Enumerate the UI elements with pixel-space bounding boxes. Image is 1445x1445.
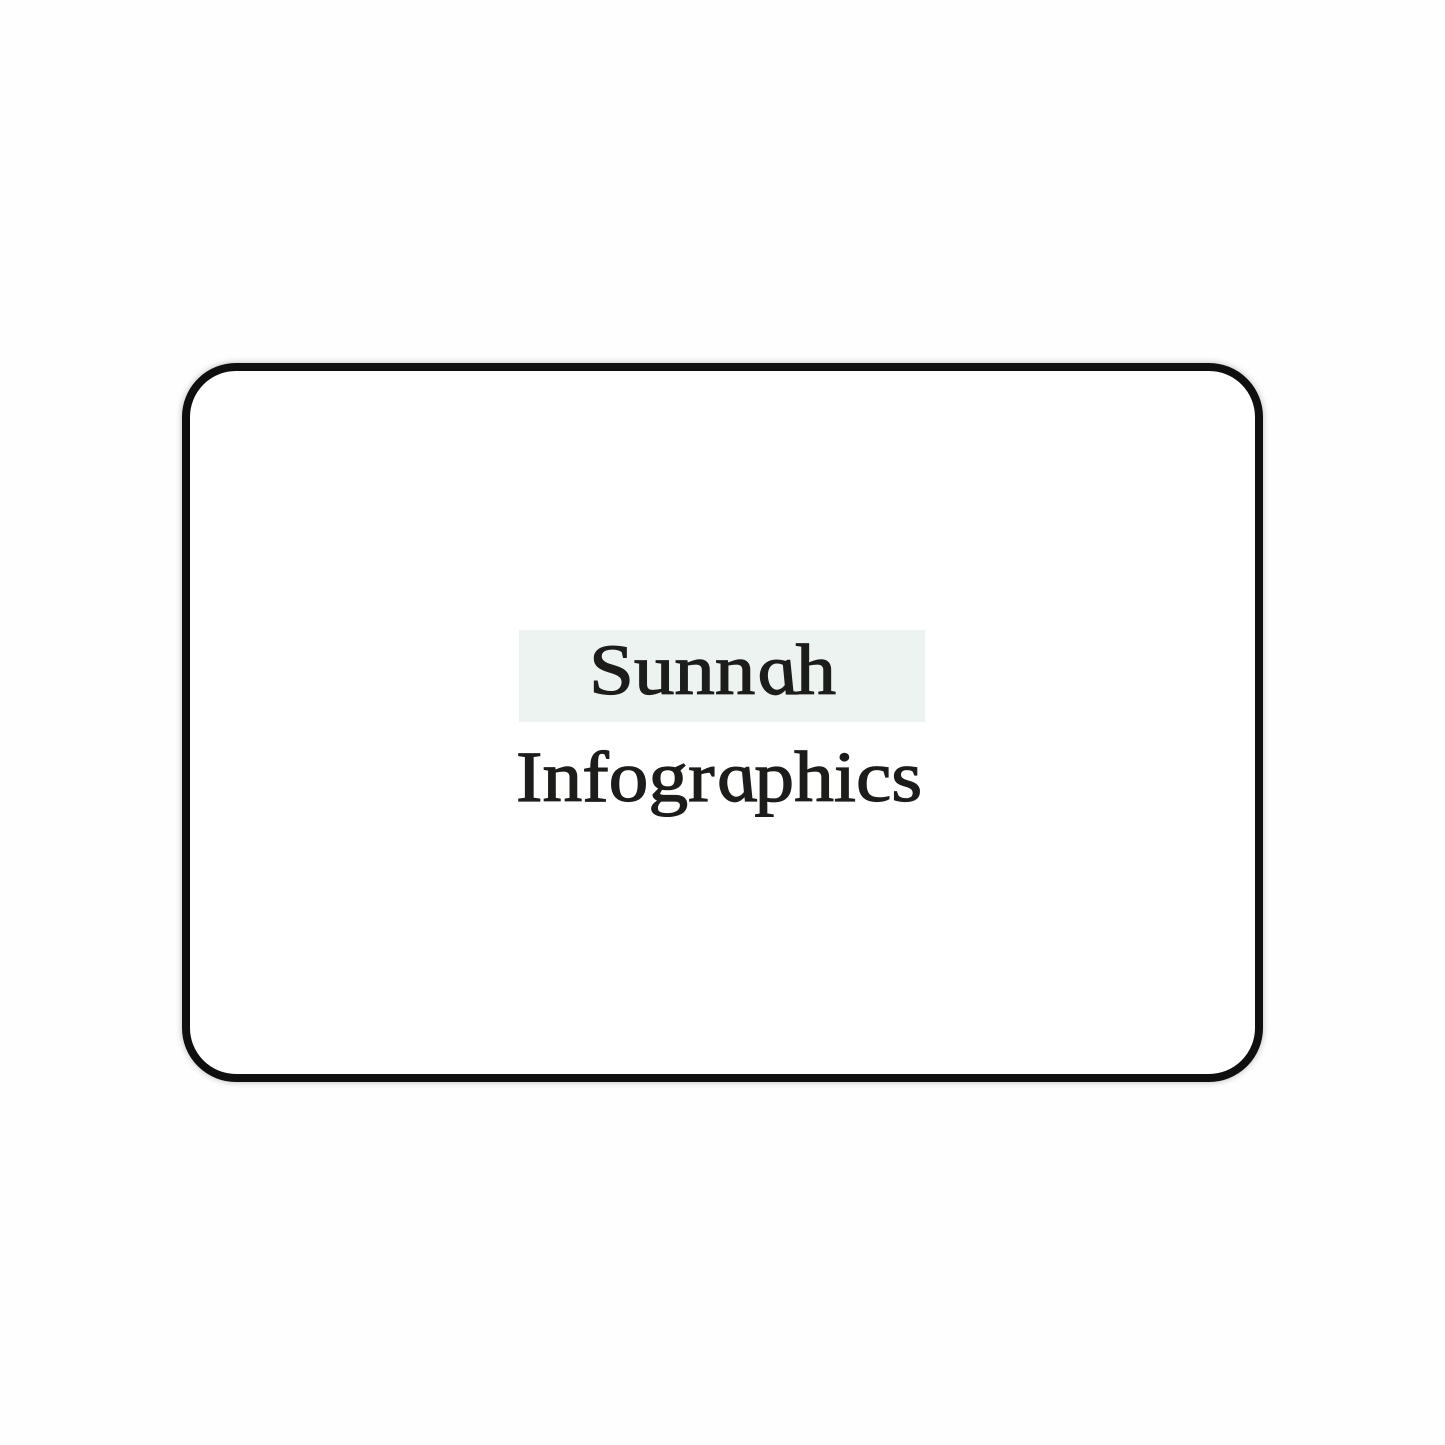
title line: Sunnah: a xyxy=(743,630,808,710)
title line: Infographics: Infogr phics xyxy=(516,737,922,817)
title line: Infographics: a xyxy=(703,737,766,817)
title line: Sunnah: Sunn h xyxy=(589,630,836,710)
panel: desk mat with black border xyxy=(182,363,1263,1082)
highlight box behind Sunnah xyxy=(519,630,925,722)
